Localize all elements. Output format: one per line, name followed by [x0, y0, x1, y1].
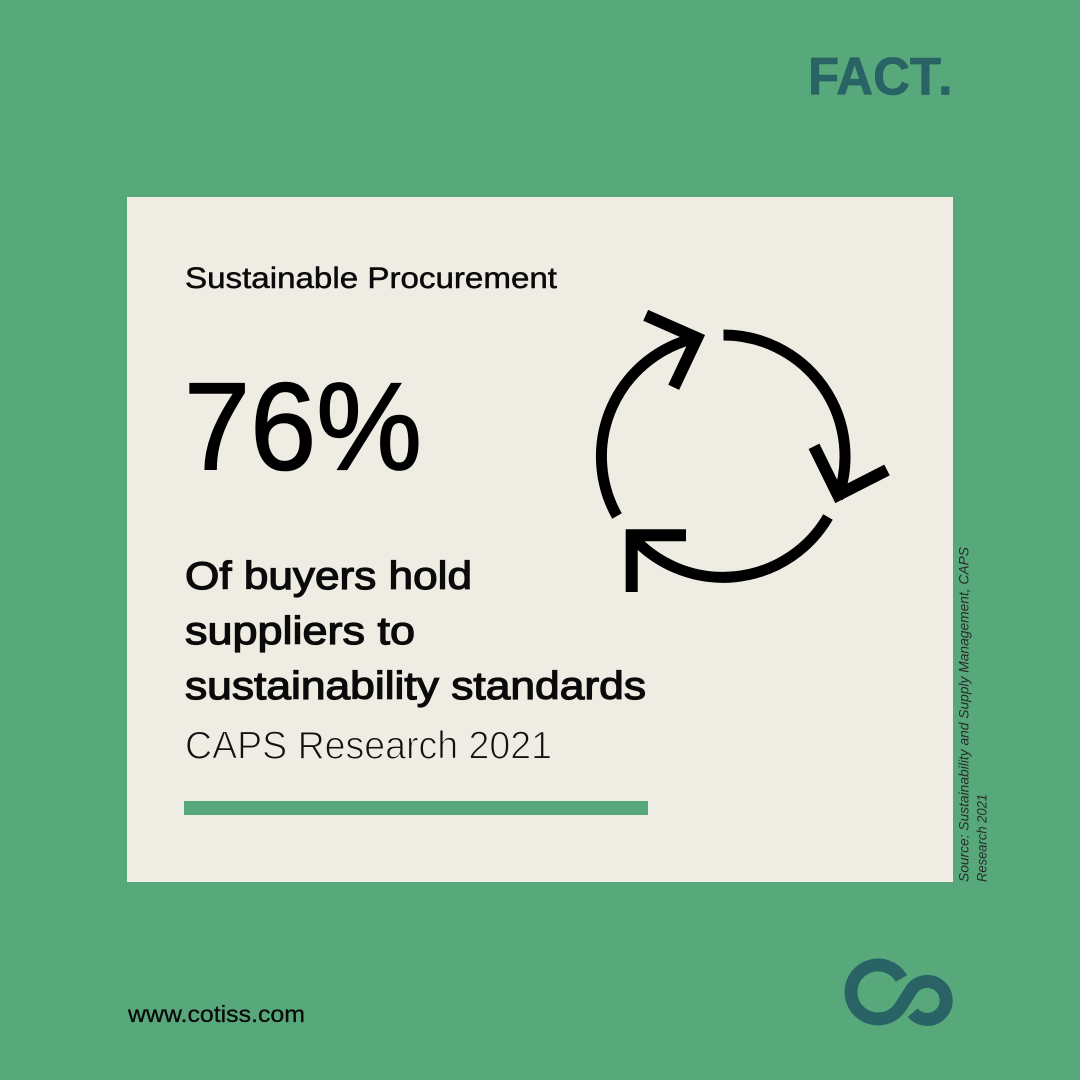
research attribution: CAPS Research 2021: [185, 724, 552, 768]
icon: recycling cycle arrows: [601, 315, 887, 592]
statement text: Of buyers hold: [185, 555, 472, 598]
panel: main card: [127, 197, 953, 882]
heading: FACT.: .: [938, 48, 953, 106]
logo: Cotiss infinity mark: [851, 965, 946, 1019]
card title: Sustainable Procurement: [185, 262, 558, 295]
website url: www.cotiss.com: [127, 1001, 305, 1027]
statement text: sustainability standards: [185, 665, 646, 708]
source note: [956, 546, 990, 882]
big statistic: 76%: 76%: [184, 358, 422, 496]
heading: FACT.: FACT: [808, 48, 941, 106]
accent bar: [184, 801, 648, 815]
source note: Source: Sustainability and Supply Management, CAPS: [956, 546, 972, 882]
statement text: suppliers to: [185, 610, 415, 653]
source note: Research 2021: [974, 794, 990, 882]
statement text: [185, 555, 646, 708]
